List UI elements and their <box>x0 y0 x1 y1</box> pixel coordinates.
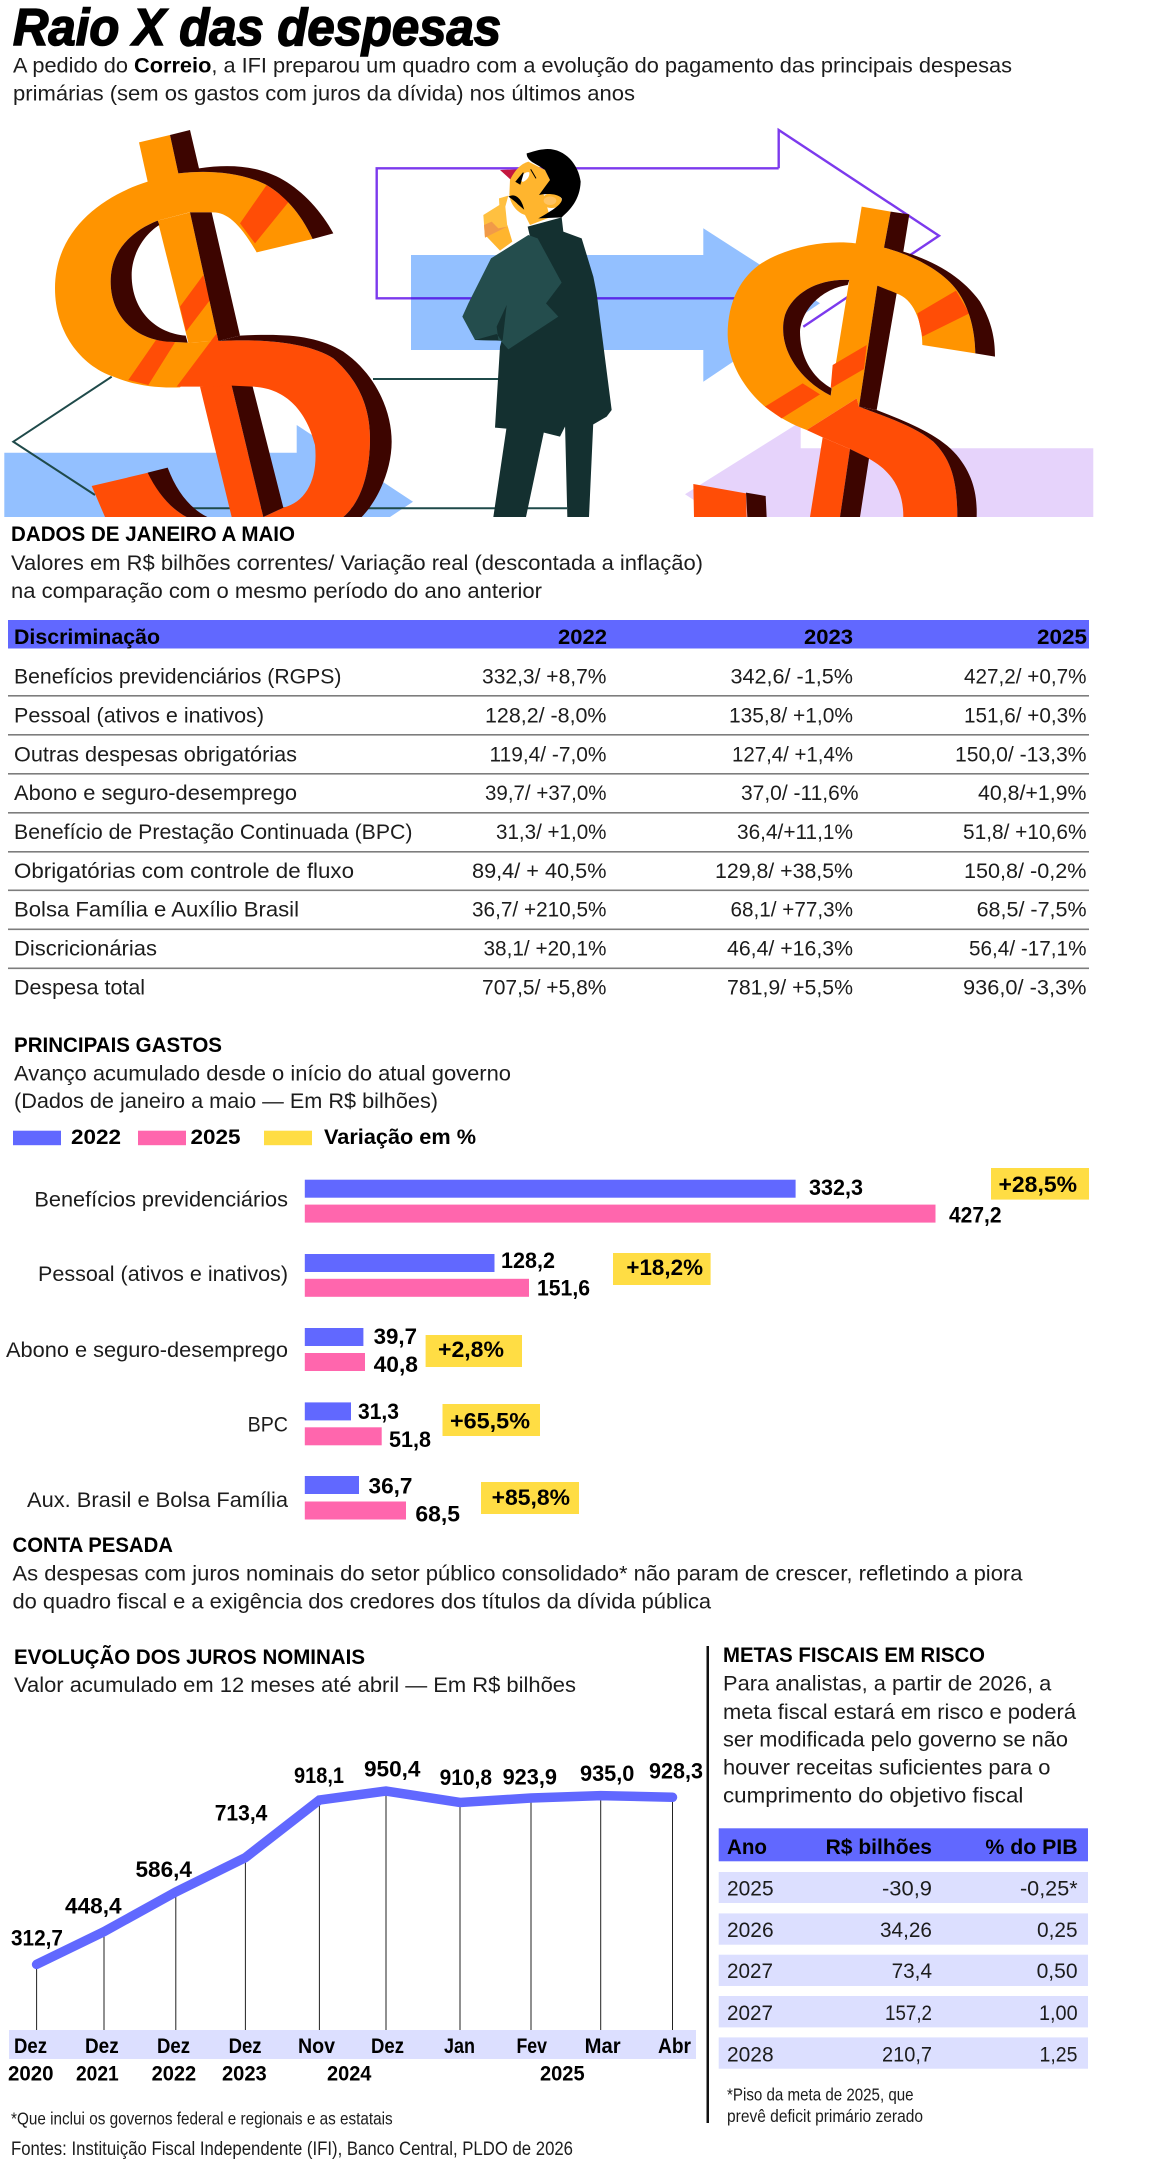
row: total: Despesa total <box>14 976 145 999</box>
row: BPC <box>14 821 1086 844</box>
table intro text <box>11 552 703 603</box>
year labels: 2023 <box>222 2063 267 2086</box>
metas table header: R$ bilhões <box>826 1836 932 1859</box>
subtitle <box>13 54 1012 106</box>
row 2027 second: 1,00 <box>1039 2002 1078 2025</box>
row: discricionarias: 56,4/ -17,1% <box>969 938 1086 961</box>
legend: 2022 <box>71 1126 121 1149</box>
bars: abono: 39,7 <box>374 1324 417 1349</box>
row 2027 <box>719 1955 1088 1986</box>
month labels: Dez <box>14 2035 47 2058</box>
metas text <box>723 1673 1076 1808</box>
row: total: 781,9/ +5,5% <box>727 976 853 999</box>
row: outras: 150,0/ -13,3% <box>955 743 1086 766</box>
row: total: 707,5/ +5,8% <box>482 976 606 999</box>
line chart subtitle: Valor acumulado em 12 meses até abril — Em R$ bilhões <box>14 1674 576 1697</box>
bars: pessoal: +18,2% <box>626 1255 703 1280</box>
data labels: 448,4 <box>65 1893 122 1918</box>
row: discricionarias: 38,1/ +20,1% <box>484 938 606 961</box>
bars: abono: +2,8% <box>438 1337 504 1362</box>
heading: conta pesada: CONTA PESADA <box>12 1534 173 1557</box>
bars: pessoal: 151,6 <box>537 1276 590 1301</box>
row: RGPS <box>14 665 1086 688</box>
bars: abono: Abono e seguro-desemprego <box>6 1339 288 1362</box>
month labels <box>14 2035 691 2058</box>
row: bolsa familia: 36,7/ +210,5% <box>472 899 606 922</box>
data labels: 713,4 <box>215 1800 268 1825</box>
month labels: Mar <box>585 2035 621 2058</box>
row 2026: 2026 <box>727 1919 774 1942</box>
bars: beneficios previdenciarios: +28,5% <box>998 1172 1077 1197</box>
row: total: 936,0/ -3,3% <box>963 976 1086 999</box>
title: Raio X das despesas <box>13 0 501 57</box>
month labels: Dez <box>85 2035 119 2058</box>
row: outras: Outras despesas obrigatórias <box>14 743 297 766</box>
row: RGPS: Benefícios previdenciários (RGPS) <box>14 665 342 688</box>
bar chart <box>6 1168 1089 1526</box>
row: BPC: 36,4/+11,1% <box>737 821 853 844</box>
metas text: Para analistas, a partir de 2026, a <box>723 1673 1052 1696</box>
row: abono: 39,7/ +37,0% <box>485 782 606 805</box>
bars: pessoal: Pessoal (ativos e inativos) <box>38 1263 288 1286</box>
data labels: 312,7 <box>11 1925 63 1950</box>
row 2028: 2028 <box>727 2044 774 2066</box>
panel: metas fiscais em risco <box>719 1644 1088 2126</box>
row: BPC: 51,8/ +10,6% <box>963 821 1086 844</box>
row 2026: 34,26 <box>880 1919 932 1942</box>
line chart <box>8 1757 703 2086</box>
conta pesada text: As despesas com juros nominais do setor público consolidado* não param de crescer, refletindo a piora <box>12 1562 1023 1585</box>
row: abono: 40,8/+1,9% <box>978 782 1086 805</box>
bars: beneficios previdenciarios: Benefícios previdenciários <box>34 1188 288 1212</box>
heading: dados de janeiro a maio: DADOS DE JANEIRO A MAIO <box>11 523 295 546</box>
bars: beneficios previdenciarios <box>34 1168 1089 1228</box>
metas text: cumprimento do objetivo fiscal <box>723 1784 1023 1808</box>
month labels: Dez <box>229 2035 262 2058</box>
month labels: Abr <box>658 2035 691 2058</box>
month labels: Dez <box>157 2035 190 2058</box>
row 2026: 0,25 <box>1037 1919 1078 1942</box>
table header: 2022 <box>558 626 607 649</box>
row: controle de fluxo: 129,8/ +38,5% <box>715 860 853 883</box>
row: pessoal: 128,2/ -8,0% <box>485 704 606 727</box>
table intro text: na comparação com o mesmo período do ano anterior <box>11 580 542 603</box>
data line <box>37 1791 673 1964</box>
row: pessoal: 151,6/ +0,3% <box>964 704 1086 727</box>
row: bolsa familia: Bolsa Família e Auxílio Brasil <box>14 899 299 922</box>
table header: 2025 <box>1037 626 1087 649</box>
bars: bolsa familia: 68,5 <box>415 1501 460 1526</box>
month labels: Nov <box>298 2035 335 2058</box>
year labels: 2025 <box>540 2063 585 2086</box>
year labels: 2022 <box>152 2063 196 2086</box>
row: pessoal: Pessoal (ativos e inativos) <box>14 704 264 727</box>
bars: bolsa familia: +85,8% <box>492 1485 570 1510</box>
icon: teal outline arrow <box>13 377 567 508</box>
icon: purple outline arrow <box>377 130 939 327</box>
table header: Discriminação <box>14 626 160 649</box>
row: discricionarias <box>14 938 1086 961</box>
row: bolsa familia: 68,1/ +77,3% <box>730 899 853 922</box>
icon: lavender arrow <box>685 422 1093 517</box>
row: total <box>14 976 1086 999</box>
icon: blue arrow lower left <box>4 425 413 517</box>
row: BPC: 31,3/ +1,0% <box>496 821 606 844</box>
row 2025: -0,25* <box>1020 1878 1078 1900</box>
metas text: houver receitas suficientes para o <box>723 1757 1050 1780</box>
row: discricionarias: Discricionárias <box>14 938 157 961</box>
heading: evolucao dos juros nominais: EVOLUÇÃO DOS JUROS NOMINAIS <box>14 1646 365 1669</box>
heading: metas fiscais: METAS FISCAIS EM RISCO <box>723 1644 985 1667</box>
row: discricionarias: 46,4/ +16,3% <box>727 938 853 961</box>
metas footnote: prevê deficit primário zerado <box>727 2106 923 2126</box>
metas text: ser modificada pelo governo se não <box>723 1728 1068 1751</box>
bars: bolsa familia: 36,7 <box>368 1474 412 1498</box>
metas table header: Ano <box>727 1836 767 1859</box>
row 2027 second <box>719 1996 1088 2027</box>
data labels: 923,9 <box>503 1765 557 1790</box>
year labels <box>8 2063 585 2086</box>
bars: beneficios previdenciarios: 332,3 <box>809 1175 863 1200</box>
icon: blue arrow centre <box>411 228 820 382</box>
row 2025: -30,9 <box>882 1878 932 1900</box>
icon: right dollar sign <box>693 207 995 517</box>
bar chart intro text: (Dados de janeiro a maio — Em R$ bilhões) <box>14 1090 438 1113</box>
row 2027 second: 2027 <box>727 2002 773 2025</box>
bars: BPC <box>248 1399 540 1452</box>
row: RGPS: 427,2/ +0,7% <box>964 665 1086 688</box>
conta pesada text <box>12 1562 1023 1613</box>
row 2028 <box>719 2037 1088 2069</box>
data labels: 950,4 <box>364 1757 421 1782</box>
bars: BPC: 51,8 <box>389 1427 431 1452</box>
heading: principais gastos: PRINCIPAIS GASTOS <box>14 1034 222 1057</box>
row 2027: 0,50 <box>1037 1960 1078 1983</box>
footnote: *Que inclui os governos federal e regionais e as estatais <box>11 2108 393 2128</box>
bars: pessoal <box>38 1248 711 1301</box>
row: controle de fluxo <box>14 860 1086 883</box>
subtitle: primárias (sem os gastos com juros da dívida) nos últimos anos <box>13 82 635 106</box>
row: bolsa familia: 68,5/ -7,5% <box>977 899 1087 922</box>
bar chart intro text: Avanço acumulado desde o início do atual governo <box>14 1063 511 1086</box>
bars: abono: 40,8 <box>374 1352 418 1377</box>
data labels <box>11 1757 703 1950</box>
bars: abono <box>6 1324 522 1377</box>
row: controle de fluxo: Obrigatórias com controle de fluxo <box>14 860 354 883</box>
bars: pessoal: 128,2 <box>501 1248 555 1273</box>
table intro text: Valores em R$ bilhões correntes/ Variação real (descontada a inflação) <box>11 552 703 575</box>
metas table header <box>719 1828 1088 1861</box>
row: outras <box>14 743 1086 766</box>
row: BPC: Benefício de Prestação Continuada (BPC) <box>14 821 412 844</box>
row 2027: 73,4 <box>892 1960 932 1983</box>
icon: thinking man <box>462 149 612 517</box>
row: controle de fluxo: 150,8/ -0,2% <box>964 860 1086 883</box>
row: outras: 127,4/ +1,4% <box>732 743 853 766</box>
conta pesada text: do quadro fiscal e a exigência dos credores dos títulos da dívida pública <box>12 1590 711 1613</box>
legend <box>13 1126 476 1149</box>
row: abono: Abono e seguro-desemprego <box>14 782 297 805</box>
icon: left dollar sign <box>55 130 392 517</box>
metas footnote <box>727 2084 923 2126</box>
row: abono: 37,0/ -11,6% <box>741 782 858 805</box>
row: pessoal <box>14 704 1086 727</box>
row 2028: 210,7 <box>882 2044 932 2066</box>
data table <box>8 620 1089 999</box>
metas table header: % do PIB <box>985 1836 1078 1859</box>
row 2025: 2025 <box>727 1878 774 1900</box>
bars: BPC: +65,5% <box>450 1408 530 1433</box>
data labels: 935,0 <box>580 1761 634 1786</box>
data labels: 918,1 <box>294 1763 344 1788</box>
row: bolsa familia <box>14 899 1087 922</box>
data labels: 586,4 <box>136 1857 193 1882</box>
row: abono <box>14 782 1086 805</box>
sources: Fontes: Instituição Fiscal Independente (IFI), Banco Central, PLDO de 2026 <box>11 2139 573 2160</box>
row: RGPS: 332,3/ +8,7% <box>482 665 606 688</box>
row 2028: 1,25 <box>1040 2044 1078 2066</box>
month labels: Fev <box>516 2035 547 2058</box>
year labels: 2024 <box>327 2063 372 2086</box>
legend: 2025 <box>190 1126 241 1149</box>
data labels: 910,8 <box>440 1765 492 1790</box>
bars: beneficios previdenciarios: 427,2 <box>949 1202 1002 1228</box>
data labels: 928,3 <box>649 1758 703 1783</box>
row 2027: 2027 <box>727 1960 773 1983</box>
axis strip <box>9 2030 696 2059</box>
table header <box>8 620 1089 649</box>
table header: 2023 <box>804 626 853 649</box>
row 2025 <box>719 1872 1088 1903</box>
illustration: man and dollar signs <box>4 130 1093 517</box>
subtitle: A pedido do Correio, a IFI preparou um quadro com a evolução do pagamento das principais despesas <box>13 54 1012 78</box>
month labels: Dez <box>371 2035 404 2058</box>
metas footnote: *Piso da meta de 2025, que <box>727 2084 914 2104</box>
row: outras: 119,4/ -7,0% <box>490 743 606 766</box>
row: RGPS: 342,6/ -1,5% <box>730 665 853 688</box>
row: controle de fluxo: 89,4/ + 40,5% <box>472 860 606 883</box>
bar chart intro text <box>14 1063 511 1113</box>
metas table <box>719 1828 1088 2069</box>
row: pessoal: 135,8/ +1,0% <box>729 704 853 727</box>
metas text: meta fiscal estará em risco e poderá <box>723 1701 1076 1724</box>
legend: Variação em % <box>324 1126 476 1149</box>
bars: BPC: BPC <box>248 1414 288 1436</box>
bars: bolsa familia: Aux. Brasil e Bolsa Família <box>27 1489 288 1512</box>
year labels: 2020 <box>8 2063 54 2086</box>
row 2027 second: 157,2 <box>885 2002 932 2025</box>
month labels: Jan <box>444 2035 475 2058</box>
row 2026 <box>719 1913 1088 1945</box>
year labels: 2021 <box>76 2063 119 2086</box>
bars: BPC: 31,3 <box>358 1399 399 1424</box>
bars: bolsa familia <box>27 1474 579 1526</box>
